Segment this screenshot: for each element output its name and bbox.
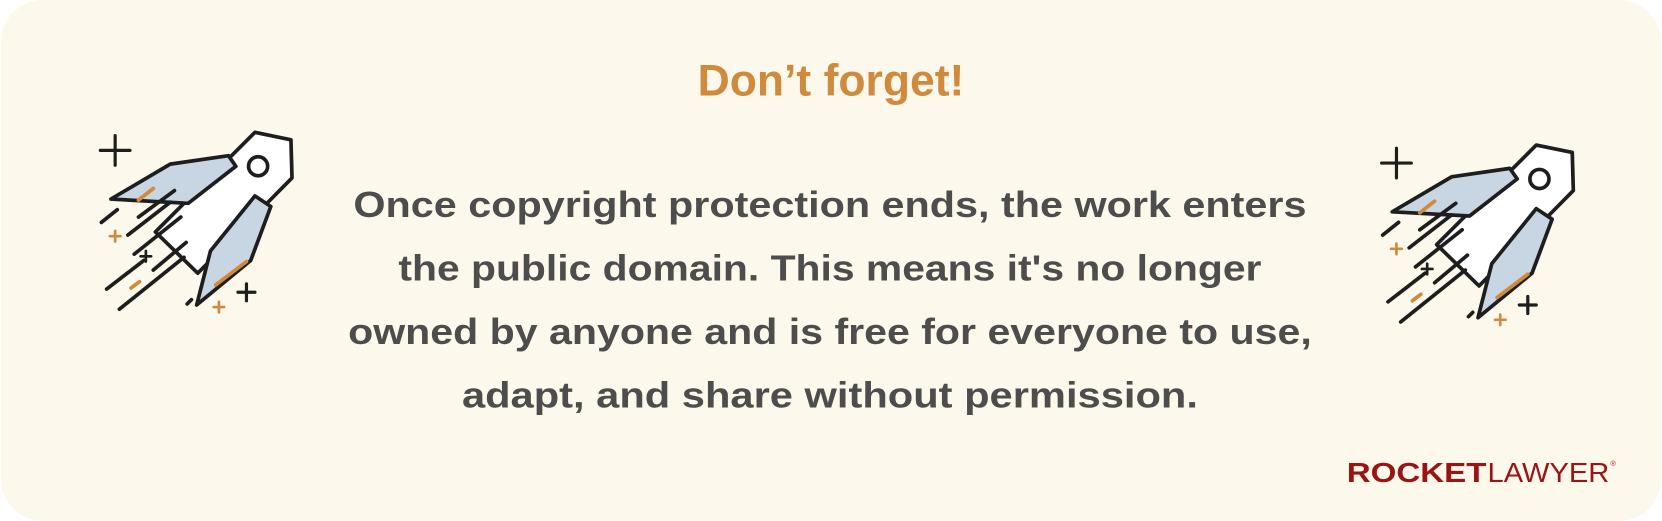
logo: ® <box>1610 459 1616 468</box>
body text <box>348 184 1312 416</box>
body text: owned by anyone and is free for everyone to use, <box>348 311 1312 352</box>
icon: rocket right <box>1382 145 1573 325</box>
icon: rocket left <box>100 132 292 312</box>
logo: ROCKET <box>1347 457 1487 488</box>
body text: the public domain. This means it's no longer <box>398 248 1261 289</box>
logo: LAWYER <box>1488 457 1609 488</box>
logo <box>1347 457 1616 488</box>
title: Don’t forget! <box>698 56 964 105</box>
body text: Once copyright protection ends, the work enters <box>353 184 1306 225</box>
body text: adapt, and share without permission. <box>462 375 1198 416</box>
